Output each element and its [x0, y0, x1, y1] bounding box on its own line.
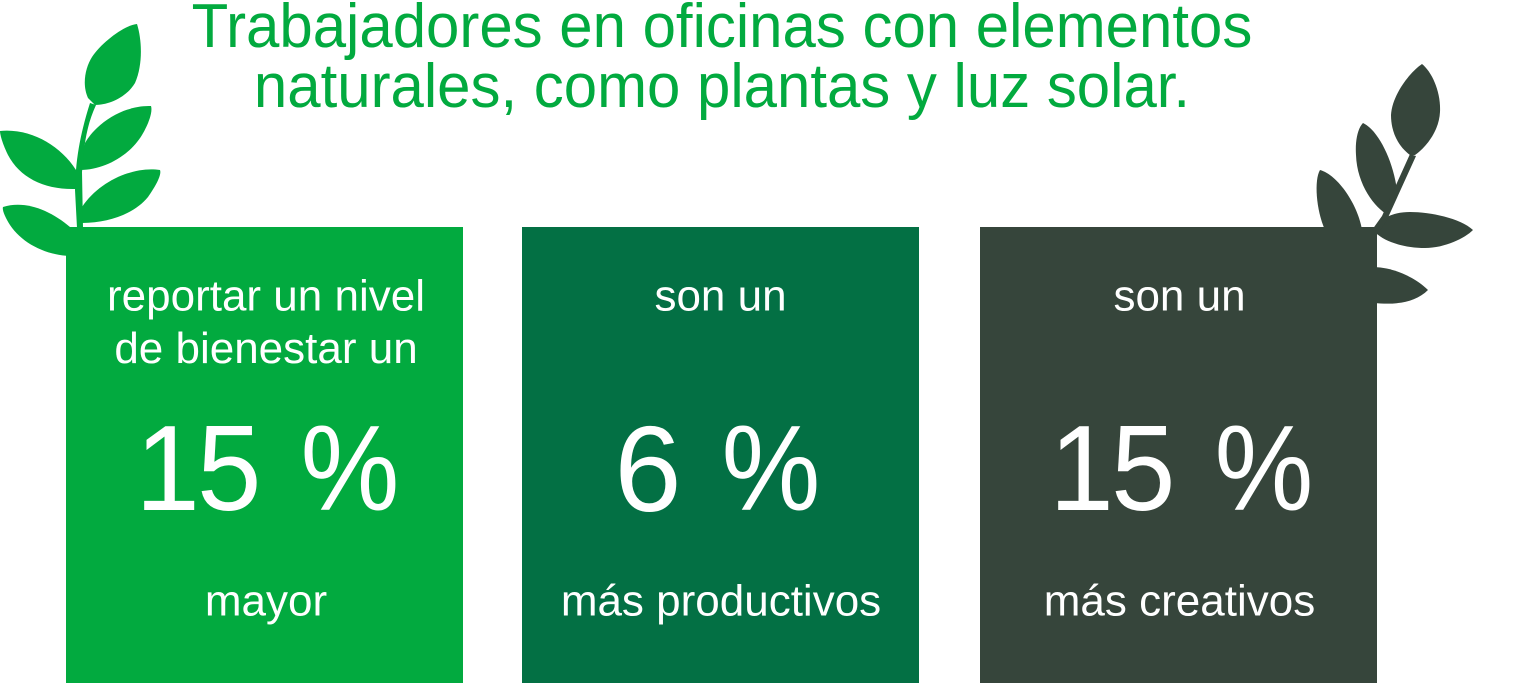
number: 15 % mayor: 15: [135, 400, 259, 537]
panel: productivos: [522, 227, 919, 683]
text: más productivos: más productivos: [561, 576, 881, 626]
text: bienestar intro: reportar un nivel: [107, 272, 425, 320]
number: 6 %: 6: [614, 400, 682, 537]
panel: creativos: [980, 227, 1377, 683]
number: 15 % creativos: 15: [1049, 400, 1173, 537]
icon: left green plant: [0, 24, 160, 256]
panel: bienestar: [66, 227, 463, 683]
number: 15 % mayor: %: [301, 399, 399, 536]
text: creativos intro: son un: [1113, 272, 1246, 320]
number: 15 % mayor: [135, 399, 399, 537]
number: 6 %: [614, 399, 820, 537]
text: productivos intro: son un: [654, 272, 787, 320]
text: mayor: mayor: [205, 576, 327, 626]
title: naturales, como plantas y luz solar.: [254, 51, 1190, 120]
number: 15 % creativos: %: [1215, 399, 1313, 536]
text: más creativos: más creativos: [1044, 576, 1315, 626]
text: bienestar intro: [107, 272, 425, 373]
text: bienestar intro: de bienestar un: [114, 324, 418, 373]
number: 15 % creativos: [1049, 399, 1313, 537]
title: [192, 0, 1252, 120]
number: 6 %: %: [722, 399, 820, 536]
icon: right dark plant: [1317, 64, 1473, 304]
